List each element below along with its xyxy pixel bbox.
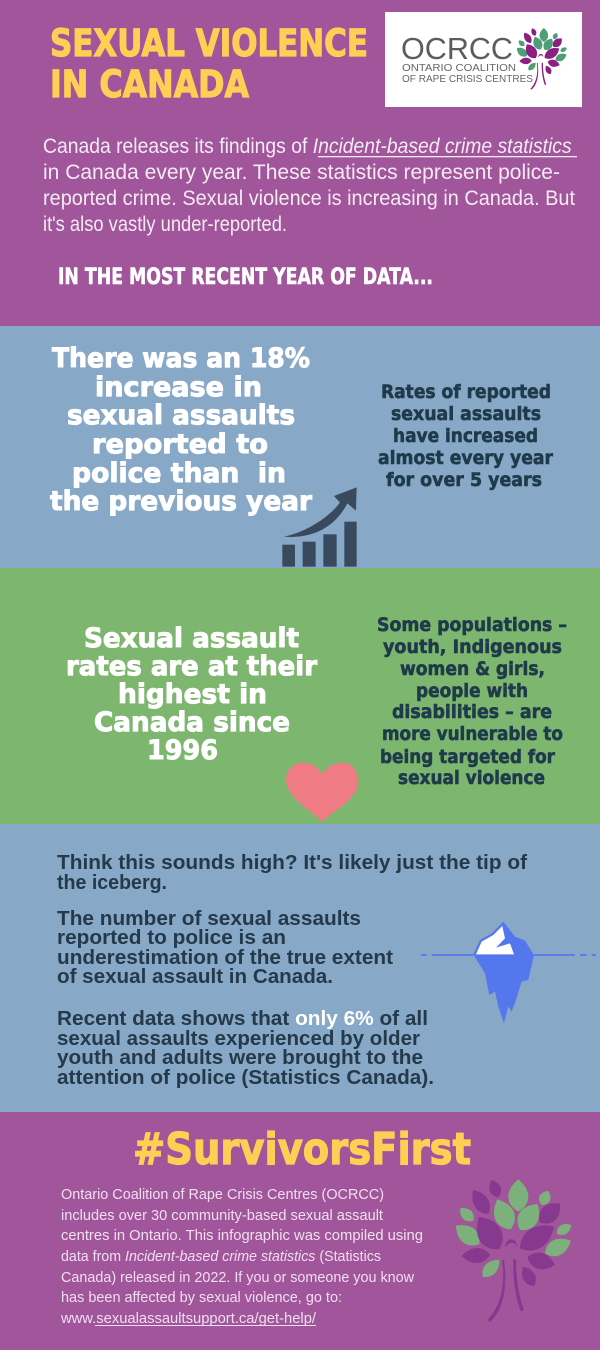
text: only 6% reported: sexual assaults experienced by older: [57, 1028, 420, 1050]
text: vulnerable populations: women & girls,: [400, 658, 545, 680]
about text: Ontario Coalition of Rape Crisis Centres (OCRCC): [61, 1186, 384, 1203]
title: IN CANADA: [50, 63, 249, 106]
hashtag heading: #SurvivorsFirst: [133, 1124, 471, 1175]
text: tip of the iceberg: [57, 852, 527, 894]
title: SEXUAL VIOLENCE: [50, 22, 368, 65]
about text: includes over 30 community-based sexual assault: [61, 1207, 384, 1224]
statistic: 18% increase: reported to: [92, 429, 268, 460]
icon: iceberg: [421, 922, 596, 1023]
icon: heart: [286, 763, 358, 822]
panel: reported increase: [0, 326, 600, 568]
statistic: 18% increase: There was an 18%: [52, 343, 310, 374]
statistic: 18% increase: police than in: [72, 458, 286, 489]
text: only 6% reported: youth and adults were brought to the: [57, 1047, 423, 1069]
statistic: highest rates: highest in: [118, 679, 267, 710]
text: only 6% reported: [57, 1008, 434, 1089]
statistic: highest rates: Canada since: [94, 707, 290, 738]
subheading: IN THE MOST RECENT YEAR OF DATA...: [58, 265, 433, 290]
text: underestimation: reported to police is an: [57, 927, 286, 949]
text: underestimation: The number of sexual assaults: [57, 908, 361, 930]
logo: OCRCC: ONTARIO COALITION: [402, 62, 516, 74]
intro paragraph: it's also vastly under-reported.: [43, 212, 287, 236]
panel: header: [0, 0, 600, 326]
text: vulnerable populations: disabilities – are: [392, 701, 552, 723]
text: vulnerable populations: people with: [416, 680, 528, 702]
about text: has been affected by sexual violence, go to:: [61, 1289, 342, 1306]
intro paragraph: Canada releases its findings of Incident-based crime statistics: [43, 134, 577, 158]
logo: OCRCC: [385, 12, 582, 107]
text: tip of the iceberg: Think this sounds high? It's likely just the tip of: [57, 852, 527, 874]
text: vulnerable populations: being targeted for: [380, 746, 556, 768]
statistic: 18% increase: sexual assaults: [67, 400, 295, 431]
text: only 6% reported: Recent data shows that only 6% of all: [57, 1008, 428, 1030]
logo: OCRCC: OF RAPE CRISIS CENTRES: [402, 73, 533, 85]
text: vulnerable populations: Some populations –: [377, 614, 567, 636]
text: rates increasing: Rates of reported: [381, 381, 551, 403]
statistic: highest rates: [66, 623, 318, 766]
text: vulnerable populations: more vulnerable to: [382, 723, 563, 745]
text: rates increasing: for over 5 years: [386, 469, 542, 491]
text: vulnerable populations: youth, Indigenous: [383, 636, 562, 658]
statistic: 18% increase: [50, 343, 313, 517]
statistic: highest rates: 1996: [147, 735, 218, 766]
intro paragraph: in Canada every year. These statistics represent police-: [43, 160, 560, 184]
text: vulnerable populations: [377, 614, 567, 789]
about text: www.sexualassaultsupport.ca/get-help/: [60, 1310, 317, 1327]
icon: rising bar chart: [282, 487, 357, 567]
title: [50, 22, 368, 106]
text: only 6% reported: attention of police (Statistics Canada).: [57, 1067, 434, 1089]
panel: highest since 1996: [0, 568, 600, 824]
icon: tree person: [451, 1178, 574, 1322]
panel: footer: [0, 1112, 600, 1350]
text: rates increasing: sexual assaults: [391, 403, 541, 425]
text: rates increasing: [378, 381, 554, 491]
statistic: highest rates: rates are at their: [66, 651, 318, 682]
statistic: 18% increase: increase in: [95, 372, 262, 403]
text: tip of the iceberg: the iceberg.: [57, 872, 167, 894]
statistic: highest rates: Sexual assault: [84, 623, 299, 654]
text: underestimation: of sexual assault in Canada.: [57, 966, 333, 988]
text: rates increasing: almost every year: [378, 447, 554, 469]
about text: [60, 1186, 423, 1327]
about text: Canada) released in 2022. If you or someone you know: [61, 1269, 414, 1286]
panel: tip of the iceberg: [0, 824, 600, 1112]
statistic: 18% increase: the previous year: [50, 486, 313, 517]
about text: data from Incident-based crime statistics (Statistics: [61, 1248, 381, 1265]
text: underestimation: underestimation of the true extent: [57, 947, 393, 969]
text: vulnerable populations: sexual violence: [398, 767, 545, 789]
text: rates increasing: have increased: [393, 425, 538, 447]
text: underestimation: [57, 908, 393, 988]
intro paragraph: [43, 134, 577, 236]
about text: centres in Ontario. This infographic was compiled using: [61, 1227, 423, 1244]
logo: OCRCC: OCRCC: [401, 31, 513, 66]
